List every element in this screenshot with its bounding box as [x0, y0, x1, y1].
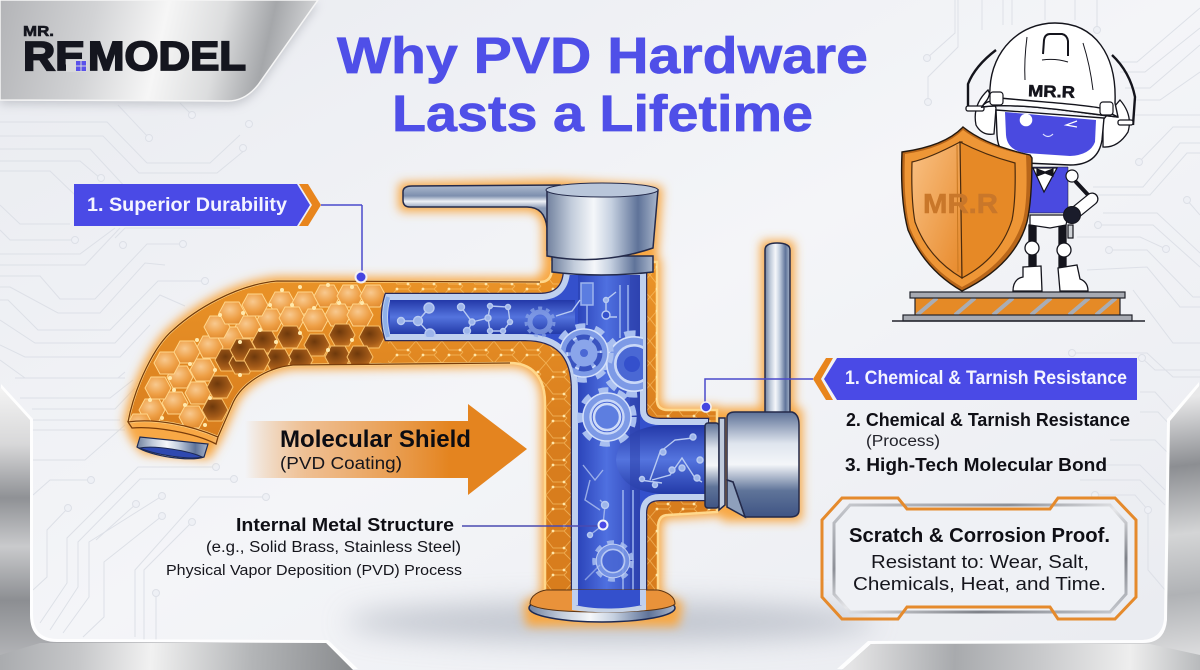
callout box: scratch and corrosion proof: Resistant to: Wear, Salt, — [871, 552, 1089, 572]
arrow: molecular shield: (PVD Coating) — [280, 453, 402, 473]
spout dark outline and mouth — [128, 281, 540, 444]
banner: chemical and tarnish resistance: 1. Chemical & Tarnish Resistance — [845, 368, 1127, 389]
text block: numbered list — [845, 410, 1130, 475]
spout honeycomb cells — [127, 283, 386, 436]
shell hexagonal web on walls — [388, 262, 717, 598]
text block: numbered list: 3. High-Tech Molecular Bond — [845, 455, 1107, 475]
title: Why PVD Hardware — [337, 27, 868, 84]
metal logo panel — [0, 0, 318, 105]
side lever arm — [765, 243, 790, 413]
left collar of blue tube — [385, 297, 388, 337]
blue internal metal structure — [385, 272, 705, 600]
banner: superior durability — [74, 184, 362, 226]
gears — [602, 330, 643, 398]
face — [1020, 114, 1077, 136]
logo: Mr. Remodel: MODEL — [88, 33, 246, 79]
metal corner: right and bottom right — [837, 382, 1200, 670]
platform — [892, 292, 1145, 321]
nozzle tip — [137, 437, 208, 459]
orange coating shell — [128, 262, 717, 600]
arrow: molecular shield — [245, 404, 527, 495]
pipe details — [581, 283, 633, 590]
earmuff straps — [968, 50, 1135, 125]
icon: purple window — [76, 61, 86, 71]
floor shadow under faucet — [345, 602, 875, 642]
side handle body — [705, 412, 799, 517]
robot arm — [1064, 170, 1092, 224]
hard hat — [982, 23, 1118, 117]
banner: chemical and tarnish resistance — [701, 358, 1137, 412]
title — [337, 27, 868, 142]
robot legs and boots — [1013, 225, 1088, 291]
metal corner: left and bottom left — [0, 384, 358, 670]
callout box: scratch and corrosion proof — [822, 498, 1136, 619]
text block: numbered list: (Process) — [866, 433, 940, 450]
robot torso — [1028, 167, 1073, 238]
earmuffs — [966, 90, 1133, 147]
callout box: scratch and corrosion proof: Scratch & Corrosion Proof. — [849, 525, 1110, 547]
base plate — [529, 590, 675, 622]
top handle lever and cap — [403, 183, 658, 275]
robot head — [996, 110, 1104, 165]
label: internal metal structure: (e.g., Solid Brass, Stainless Steel) — [206, 539, 461, 556]
callout box: scratch and corrosion proof: Chemicals, Heat, and Time. — [853, 574, 1106, 594]
label: internal metal structure: Internal Metal Structure — [236, 515, 454, 535]
hard hat label: MR.R — [1028, 82, 1075, 102]
icon: orange shield — [902, 127, 1032, 291]
mascot: robot with shield on platform — [892, 23, 1145, 321]
label: internal metal structure: Physical Vapor Deposition (PVD) Process — [166, 563, 462, 579]
arrow: molecular shield: Molecular Shield — [280, 426, 471, 453]
banner: superior durability: 1. Superior Durability — [87, 195, 287, 216]
faucet orange glow — [128, 184, 798, 622]
text block: numbered list: 2. Chemical & Tarnish Resistance — [846, 410, 1130, 430]
logo: Mr. Remodel — [23, 23, 246, 79]
title: Lasts a Lifetime — [392, 85, 813, 142]
icon: orange shield: MR.R — [923, 188, 998, 219]
faucet illustration — [127, 183, 799, 622]
logo: Mr. Remodel: MR. — [23, 23, 54, 40]
label: internal metal structure — [166, 515, 608, 579]
logo: Mr. Remodel: RE — [23, 33, 85, 79]
callout dot: durability — [356, 205, 366, 282]
molecules — [398, 292, 703, 580]
